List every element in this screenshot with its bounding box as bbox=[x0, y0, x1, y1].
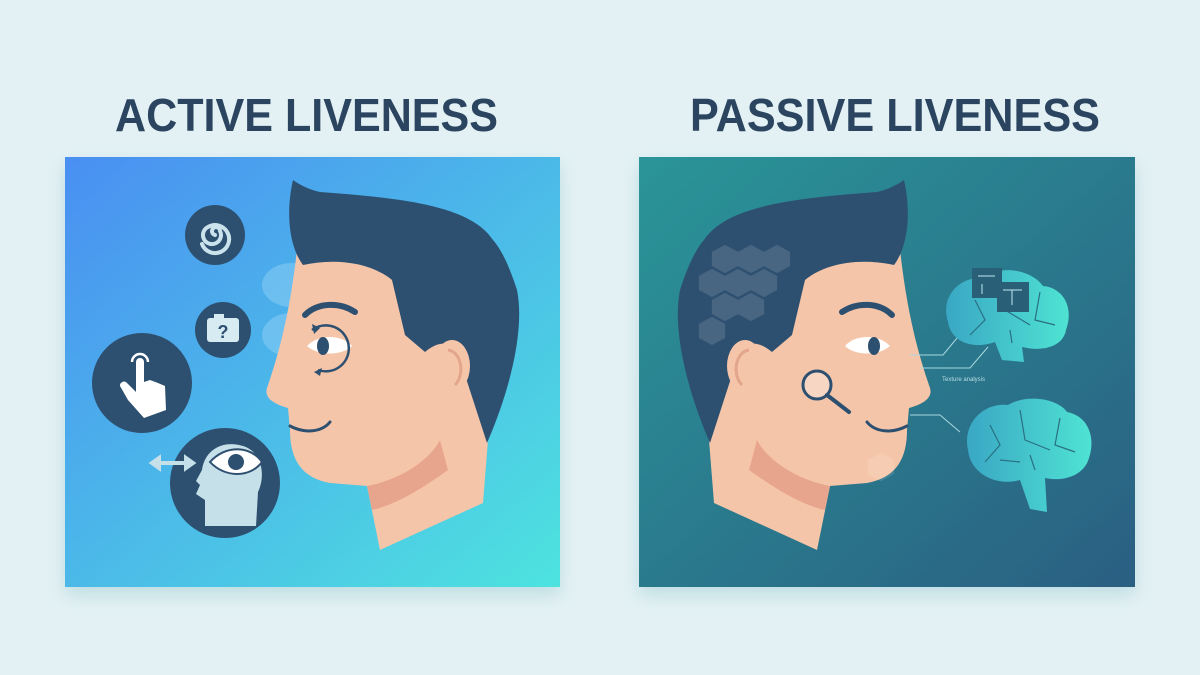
illustration: head with eye rotation bbox=[266, 180, 519, 550]
label: texture analysis: Texture analysis bbox=[942, 377, 985, 383]
icon: camera question bbox=[195, 302, 251, 358]
icon: head with eye bbox=[152, 428, 280, 538]
panel: passive liveness bbox=[639, 157, 1135, 587]
icon: camera question: ? bbox=[218, 322, 228, 342]
panel: active liveness bbox=[65, 157, 560, 587]
icon: spiral bbox=[185, 205, 245, 265]
icon: magnifier bbox=[803, 371, 831, 399]
icon: brain top bbox=[946, 268, 1069, 362]
icon: brain bottom bbox=[967, 399, 1091, 512]
title: active liveness: ACTIVE LIVENESS bbox=[115, 89, 498, 141]
illustration: head with texture analysis bbox=[678, 180, 931, 550]
title: passive liveness: PASSIVE LIVENESS bbox=[690, 89, 1100, 141]
icon: tap hand bbox=[92, 333, 192, 433]
